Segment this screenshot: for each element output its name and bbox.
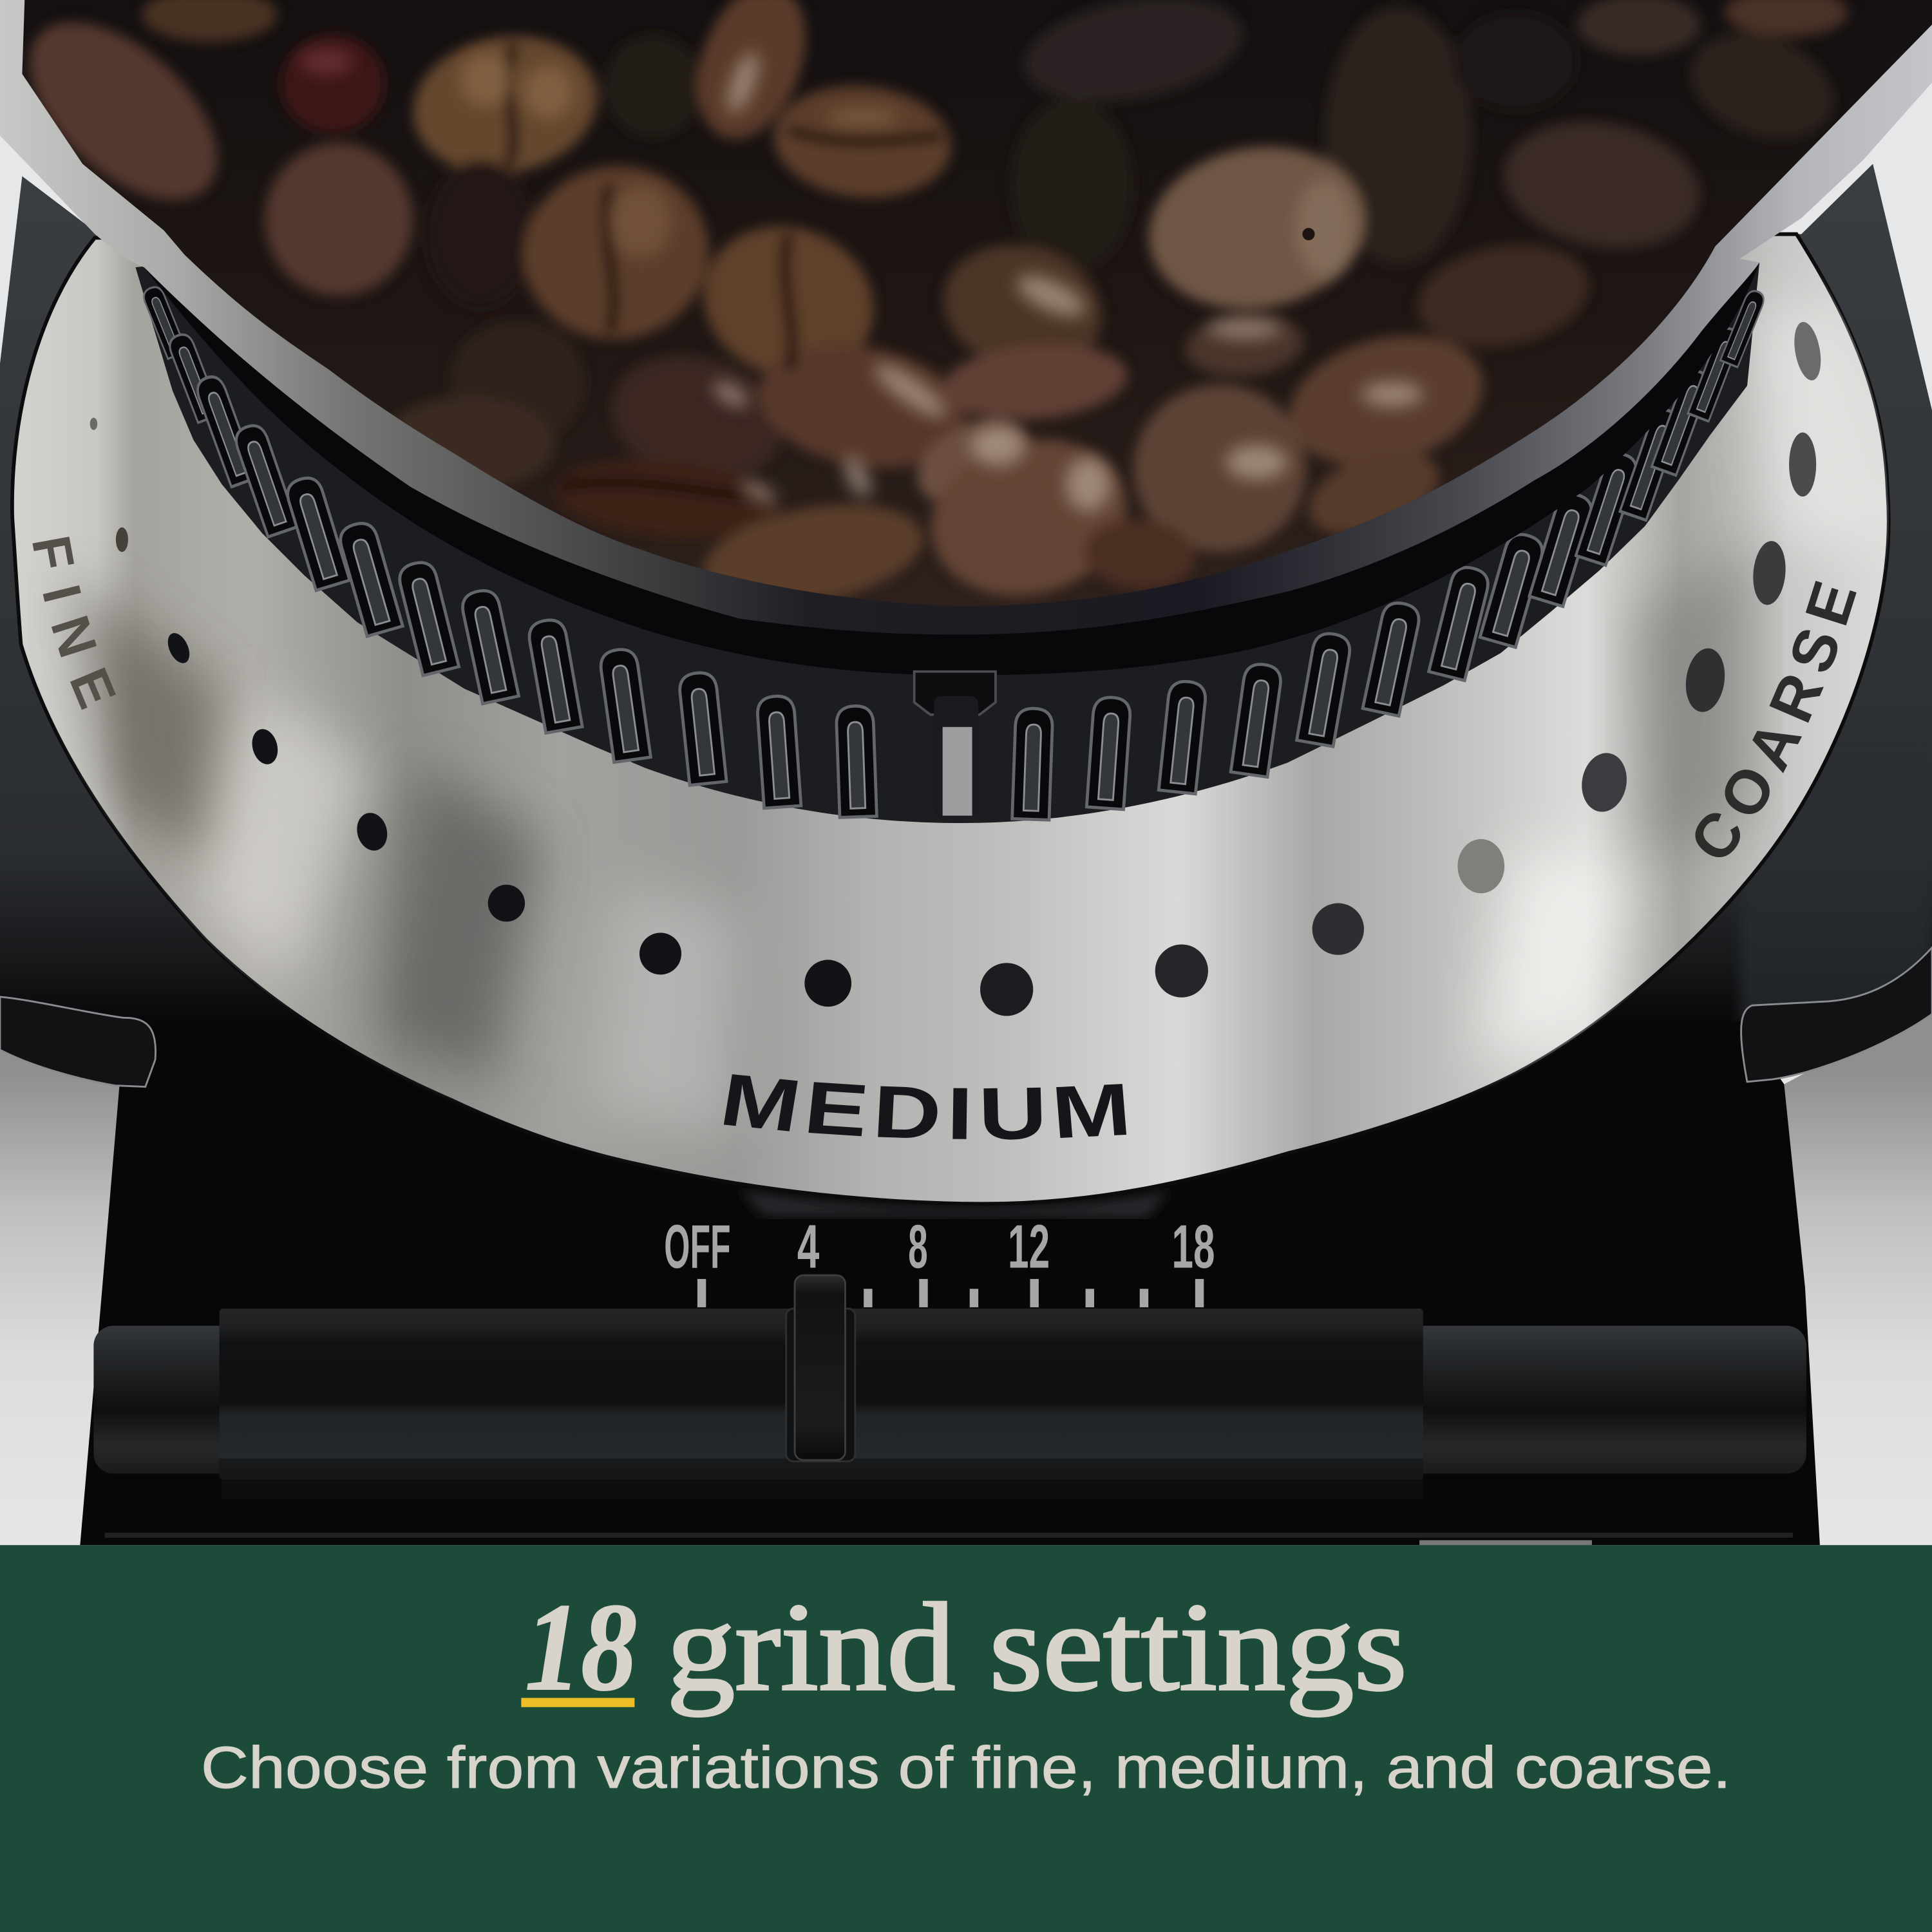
- slider knob: [786, 1275, 855, 1461]
- dark collar under hopper: [144, 263, 1759, 675]
- label: FINE: FINE: [32, 536, 116, 710]
- yellow underline: [521, 1698, 634, 1707]
- setting scale labels: OFF: [664, 1213, 731, 1282]
- adjustment ring ribs: [141, 285, 1766, 820]
- setting scale labels: 8: [908, 1213, 928, 1282]
- heading: 18 grind settings: 18: [525, 1578, 637, 1717]
- setting scale labels: [664, 1213, 1215, 1282]
- right upper body shading: [1740, 739, 1932, 1023]
- slider rail: [93, 1326, 1806, 1473]
- grinder lower body: [80, 1021, 1820, 1545]
- setting scale labels: 18: [1172, 1213, 1215, 1282]
- base edge highlight: [1419, 1540, 1592, 1545]
- setting scale labels: 4: [797, 1213, 819, 1282]
- hopper with coffee beans: [0, 0, 1932, 634]
- slider housing: [220, 1309, 1423, 1499]
- right steel side panel: [1784, 1004, 1932, 1545]
- left shoulder trim: [0, 997, 156, 1087]
- base shadow line: [105, 1533, 1793, 1538]
- adjustment ring base: [135, 247, 1759, 823]
- grinder upper body: [0, 164, 1932, 1072]
- left steel side panel: [0, 1047, 120, 1545]
- grind size dots: [90, 320, 1825, 1016]
- label: MEDIUM: MEDIUM: [724, 1074, 1126, 1140]
- subheading: Choose from variations of fine, medium, and coarse.: [201, 1735, 1731, 1801]
- right shoulder trim: [1741, 947, 1932, 1082]
- heading: 18 grind settings: grind settings: [667, 1578, 1407, 1717]
- setting scale ticks: [697, 1279, 1204, 1307]
- setting scale labels: 12: [1008, 1213, 1050, 1282]
- bottom green caption panel: [0, 1545, 1932, 1932]
- ring pointer marker: [914, 672, 996, 817]
- stainless steel dial band: [12, 234, 1889, 1217]
- label: COARSE: COARSE: [1695, 581, 1857, 857]
